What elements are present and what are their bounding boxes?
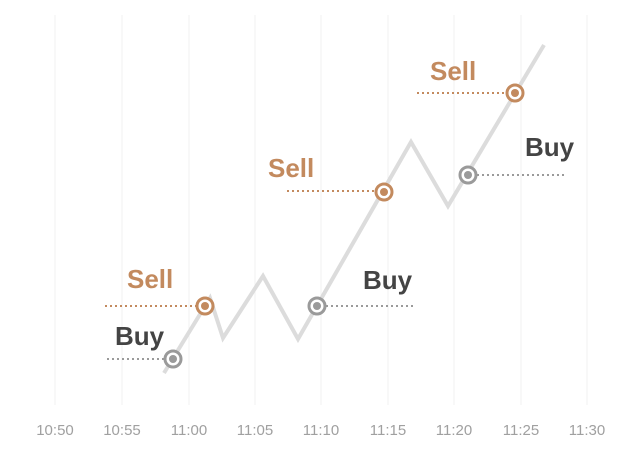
axis labels: 10:50 [36, 422, 74, 439]
labels: Sell [268, 153, 314, 183]
labels: Buy [363, 265, 413, 295]
price line [164, 45, 544, 373]
axis labels [36, 422, 605, 439]
labels [115, 56, 575, 351]
axis labels: 11:00 [171, 422, 207, 439]
axis labels: 11:15 [370, 422, 406, 439]
labels: Sell [430, 56, 476, 86]
dotted leader lines [105, 93, 566, 359]
axis labels: 11:10 [303, 422, 339, 439]
axis labels: 11:25 [503, 422, 539, 439]
axis labels: 11:05 [237, 422, 273, 439]
labels: Buy [525, 132, 575, 162]
labels: Buy [115, 321, 165, 351]
markers [165, 85, 523, 367]
axis labels: 10:55 [103, 422, 141, 439]
axis labels: 11:20 [436, 422, 472, 439]
labels: Sell [127, 264, 173, 294]
axis labels: 11:30 [569, 422, 605, 439]
